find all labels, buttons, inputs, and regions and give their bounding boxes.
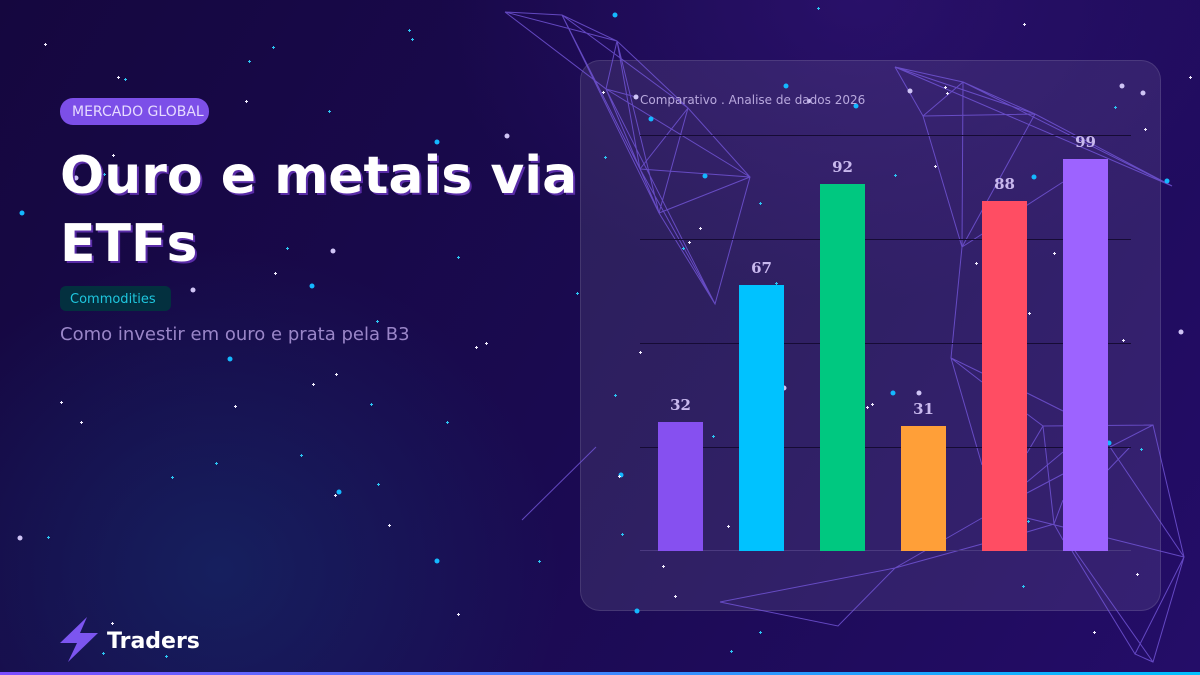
chart caption: Comparativo . Analise de dados 2026 — [640, 93, 865, 107]
bar: 32: 32 — [670, 396, 691, 414]
brand name: Traders — [107, 629, 200, 654]
logo — [60, 617, 200, 662]
tag: commodities — [60, 286, 171, 311]
bar: 92 — [820, 158, 865, 551]
bar: 99 — [1063, 133, 1108, 551]
bar: 31 — [901, 400, 946, 551]
bottom accent bar — [0, 672, 1200, 675]
badge: mercado global — [60, 98, 209, 125]
tag: commodities: Commodities — [70, 292, 156, 307]
subtitle: Como investir em ouro e prata pela B3 — [60, 324, 410, 345]
title: ETFs — [60, 214, 197, 274]
bar: 67: 67 — [751, 259, 772, 277]
bar: 99: 99 — [1075, 133, 1096, 151]
bar: 32 — [658, 396, 703, 551]
title — [60, 146, 577, 274]
icon: lightning bolt — [60, 617, 98, 662]
bar: 92: 92 — [832, 158, 853, 176]
title: Ouro e metais via — [60, 146, 577, 206]
badge: mercado global: MERCADO GLOBAL — [72, 104, 204, 120]
bar: 88: 88 — [994, 175, 1015, 193]
bar: 67 — [739, 259, 784, 551]
bar: 31: 31 — [913, 400, 934, 418]
bar: 88 — [982, 175, 1027, 551]
panel: chart card — [580, 60, 1161, 611]
